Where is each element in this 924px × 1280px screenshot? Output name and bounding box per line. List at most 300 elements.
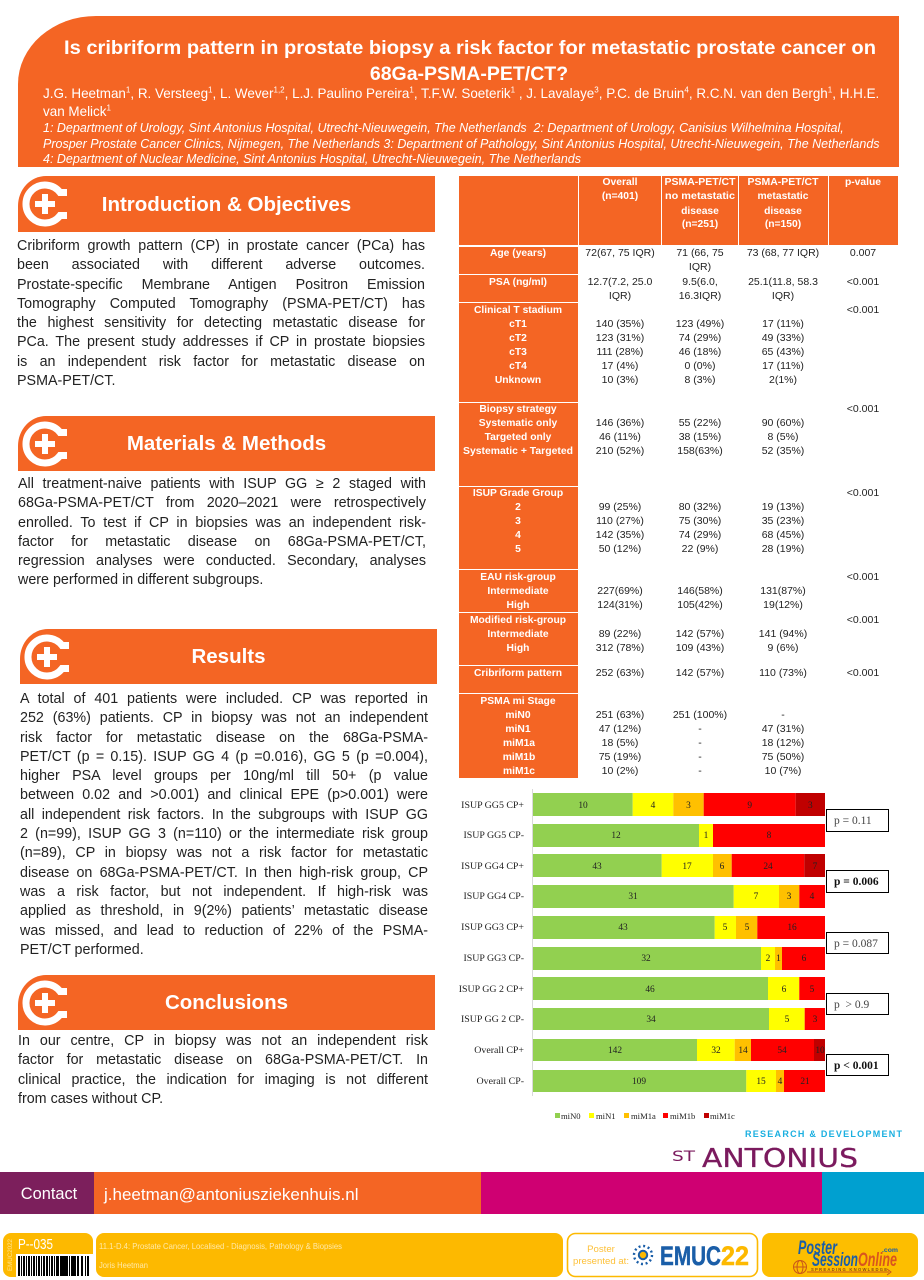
row: PSMA mi stage: 251 (100%) — [673, 709, 727, 721]
bar: ISUP GG4 CP-: 31 — [628, 892, 638, 902]
text block: conclusions — [18, 1033, 428, 1107]
bar: ISUP GG3 CP+: 5 — [745, 923, 750, 933]
table header row — [459, 176, 898, 245]
row: ISUP grade group: 75 (30%) — [679, 515, 721, 527]
bar: Overall CP-: 4 — [778, 1077, 783, 1087]
table header row: disease — [764, 206, 802, 217]
bar: ISUP GG4 CP-: 7 — [754, 892, 759, 902]
row: PSMA mi stage: 75 (19%) — [599, 751, 641, 763]
row: age: 73 (68, 77 IQR) — [747, 247, 819, 259]
heading: Conclusions — [165, 991, 288, 1014]
text block: introduction: Cribriform growth pattern (CP) in prostate cancer (PCa) has — [17, 238, 425, 254]
logo wordmark: ST — [672, 1149, 696, 1165]
barcode — [18, 1256, 89, 1276]
row: PSMA mi stage: 251 (63%) — [596, 709, 644, 721]
logo wordmark — [672, 1144, 858, 1174]
chart legend: miN0 — [561, 1111, 581, 1121]
text block: methods: 68Ga-PSMA-PET/CT from 2020–2021 were retrospectively — [18, 495, 426, 511]
bar: ISUP GG 2 CP-: 5 — [785, 1015, 790, 1025]
PosterSessionOnline panel: Session — [812, 1250, 858, 1271]
row: PSMA mi stage: 75 (50%) — [762, 751, 804, 763]
colour block: magenta — [481, 1172, 822, 1214]
row: ISUP grade group: 3 — [515, 516, 521, 527]
row: ISUP grade group: 99 (25%) — [599, 501, 641, 513]
row: clinical T stadium: 17 (11%) — [762, 360, 804, 372]
affiliations: 4: Department of Nuclear Medicine, Sint Antonius Hospital, Utrecht-Nieuwegein, The Netherlands — [43, 152, 581, 166]
title — [64, 37, 876, 85]
row: biopsy strategy: 55 (22%) — [679, 417, 721, 429]
text block: introduction: the highest sensitivity for detecting metastatic disease for — [17, 315, 425, 331]
bar: Overall CP-: Overall CP- — [477, 1076, 524, 1087]
row: ISUP grade group: 4 — [515, 530, 521, 541]
bar: ISUP GG4 CP+: ISUP GG4 CP+ — [461, 861, 524, 872]
affiliations: Prosper Prostate Cancer Clinics, Nijmegen, The Netherlands 3: Department of Pathology, Sint Antonius Hospital, Utrecht-Nieuwegein, The Netherlands — [43, 136, 880, 150]
contact label background — [0, 1172, 94, 1214]
p-value box: GG3: p = 0.087 — [834, 938, 878, 950]
bar: ISUP GG 2 CP- — [461, 1008, 825, 1030]
table header row: Overall — [603, 177, 638, 188]
row: PSA: PSA (ng/ml) — [489, 277, 547, 288]
icon: medical cross — [22, 980, 67, 1026]
bar: ISUP GG 2 CP+: ISUP GG 2 CP+ — [459, 984, 524, 995]
row: ISUP grade group: <0.001 — [847, 487, 879, 499]
bar: ISUP GG5 CP+ — [461, 793, 825, 816]
row: age: 0.007 — [850, 247, 876, 259]
row: PSMA mi stage: - — [698, 751, 702, 763]
section header: Conclusions — [18, 975, 435, 1030]
row: ISUP grade group: 110 (27%) — [596, 515, 644, 527]
stacked bar chart: PSMA mi stage by ISUP group and CP — [459, 789, 889, 1121]
heading: Results — [191, 645, 266, 668]
row: EAU risk-group: 105(42%) — [677, 599, 723, 611]
table header row: no metastatic — [665, 191, 735, 202]
row: PSMA mi stage: 18 (12%) — [762, 737, 804, 749]
icon: medical cross — [24, 634, 69, 680]
row: PSMA mi stage: miN0 — [505, 710, 531, 721]
row: cribriform pattern: 110 (73%) — [759, 667, 807, 679]
bar: Overall CP+: 142 — [608, 1046, 622, 1056]
icon: medical cross — [22, 182, 67, 226]
bar: ISUP GG3 CP-: 2 — [766, 954, 771, 964]
table header row: PSMA-PET/CT — [748, 177, 819, 188]
table header row: disease — [681, 206, 719, 217]
text block: results: was missed, and lead to reduction of 22% of the PSMA- — [20, 923, 428, 939]
row: biopsy strategy: 8 (5%) — [768, 431, 798, 443]
EMUC22 panel: EMUC — [660, 1241, 721, 1271]
row: PSMA mi stage: miN1 — [505, 724, 531, 735]
bar: ISUP GG4 CP+ — [461, 854, 825, 877]
row: biopsy strategy: 38 (15%) — [679, 431, 721, 443]
text block: results: all independent risk factors. In the subgroups with ISUP GG — [20, 807, 428, 823]
row: age: Age (years) — [490, 248, 546, 259]
row: PSMA mi stage: 47 (31%) — [762, 723, 804, 735]
row: cribriform pattern: 142 (57%) — [676, 667, 724, 679]
text block: methods: regression analyses were conducted. Secondary, analyses — [18, 553, 426, 569]
row: ISUP grade group: 35 (23%) — [762, 515, 804, 527]
row: clinical T stadium: 2(1%) — [769, 374, 797, 386]
bar: Overall CP+ — [474, 1039, 825, 1061]
row: ISUP grade group: 68 (45%) — [762, 529, 804, 541]
row: PSA: 12.7(7.2, 25.0 — [588, 276, 653, 288]
icon: EMUC sun — [634, 1246, 652, 1264]
row: clinical T stadium: 74 (29%) — [679, 332, 721, 344]
bar: ISUP GG 2 CP-: 34 — [646, 1015, 656, 1025]
row: clinical T stadium: 17 (11%) — [762, 318, 804, 330]
text block: introduction: PCa. The present study addresses if CP in prostate biopsies — [17, 334, 425, 350]
poster id badge: P--035 — [18, 1237, 53, 1253]
row: clinical T stadium: 49 (33%) — [762, 332, 804, 344]
text block: methods: enrolled. To test if CP in biopsies was an independent risk- — [18, 515, 426, 531]
contact label: Contact — [21, 1185, 77, 1203]
bar: ISUP GG3 CP+: 5 — [723, 923, 728, 933]
row: ISUP grade group: 5 — [515, 544, 521, 555]
table header row: (n=150) — [765, 219, 801, 230]
row: clinical T stadium: 10 (3%) — [602, 374, 638, 386]
row: clinical T stadium: 123 (49%) — [676, 318, 724, 330]
row: PSMA mi stage — [459, 694, 804, 778]
authors: van Melick1 — [43, 104, 111, 119]
bar: ISUP GG5 CP-: 8 — [767, 831, 772, 841]
row: PSMA mi stage: 47 (12%) — [599, 723, 641, 735]
row: modified risk-group: Intermediate — [487, 629, 549, 640]
row: clinical T stadium: 111 (28%) — [597, 346, 643, 358]
row: PSMA mi stage: - — [698, 765, 702, 777]
row: ISUP grade group: 80 (32%) — [679, 501, 721, 513]
contact email: j.heetman@antoniusziekenhuis.nl — [104, 1185, 358, 1204]
bar: Overall CP+: 10 — [815, 1046, 825, 1056]
EMUC22 panel: presented at: — [573, 1256, 629, 1267]
row: PSA: IQR) — [772, 290, 794, 302]
p-value box: GG4: p = 0.006 — [834, 876, 879, 888]
text block: methods — [18, 476, 426, 588]
p-value box: GG2 — [826, 994, 888, 1014]
PosterSessionOnline panel: Online — [858, 1250, 897, 1271]
heading: Materials & Methods — [127, 432, 326, 455]
bar: ISUP GG3 CP-: 1 — [776, 954, 781, 964]
row: clinical T stadium: cT4 — [509, 361, 527, 372]
text block: conclusions: clinical practice, the indication for imaging is not different — [18, 1072, 428, 1088]
row: age: 72(67, 75 IQR) — [585, 247, 655, 259]
bar: ISUP GG 2 CP-: 3 — [813, 1015, 818, 1025]
EMUC22 panel: 22 — [721, 1241, 749, 1271]
bar: ISUP GG4 CP+: 24 — [763, 862, 773, 872]
row: PSA: 9.5(6.0, — [682, 276, 718, 288]
row: PSA: 25.1(11.8, 58.3 — [748, 276, 818, 288]
p-value box: GG5 — [826, 810, 888, 832]
row: EAU risk-group: Intermediate — [487, 586, 549, 597]
row: clinical T stadium: 65 (43%) — [762, 346, 804, 358]
bar: ISUP GG5 CP+: 9 — [747, 801, 752, 811]
text block: introduction: PSMA-PET/CT. — [17, 373, 116, 389]
row: EAU risk-group: High — [507, 600, 529, 611]
bar: Overall CP+: 32 — [711, 1046, 721, 1056]
icon: medical cross — [22, 422, 67, 466]
row: EAU risk-group: 146(58%) — [677, 585, 723, 597]
row: age: IQR) — [689, 261, 711, 273]
colour block: blue — [822, 1172, 924, 1214]
bar: Overall CP+: Overall CP+ — [474, 1045, 524, 1056]
row: biopsy strategy — [459, 403, 879, 486]
row: EAU risk-group — [459, 570, 879, 612]
row: PSMA mi stage: - — [698, 723, 702, 735]
p-value box: overall: p < 0.001 — [834, 1060, 879, 1072]
p-value box: overall — [826, 1054, 888, 1076]
text block: conclusions: In our centre, CP in biopsy was not an independent risk — [18, 1033, 428, 1049]
row: clinical T stadium: 17 (4%) — [602, 360, 638, 372]
row: PSMA mi stage: 10 (2%) — [602, 765, 638, 777]
EMUC22 panel — [568, 1234, 758, 1276]
text block: conclusions: factor for metastatic disease on 68Ga-PSMA-PET/CT. In — [18, 1052, 428, 1068]
bar: ISUP GG5 CP+: 3 — [808, 801, 813, 811]
row: biopsy strategy: 158(63%) — [677, 445, 723, 457]
title: Is cribriform pattern in prostate biopsy a risk factor for metastatic prostate cancer on — [64, 37, 876, 59]
row: biopsy strategy: 52 (35%) — [762, 445, 804, 457]
row: ISUP grade group: 28 (19%) — [762, 543, 804, 555]
bar: ISUP GG5 CP+: 10 — [578, 801, 588, 811]
PosterSessionOnline panel: SPREADING KNOWLEDGE — [811, 1267, 887, 1272]
chart legend: miM1b — [670, 1111, 695, 1121]
row: modified risk-group: Modified risk-group — [470, 615, 566, 626]
row: clinical T stadium: cT3 — [509, 347, 527, 358]
text block: results: (n=89), CP in biopsy was not a risk factor for metastatic — [20, 845, 428, 861]
row: biopsy strategy: <0.001 — [847, 403, 879, 415]
row: PSMA mi stage: miM1c — [503, 766, 535, 777]
row: PSA — [459, 275, 879, 302]
text block: results: applied as threshold, in 9(2%) patients’ metastatic disease — [20, 903, 428, 919]
logo: St Antonius research & development — [672, 1129, 902, 1172]
bar: ISUP GG5 CP-: ISUP GG5 CP- — [463, 830, 524, 841]
text block: introduction — [17, 238, 425, 389]
row: cribriform pattern: 252 (63%) — [596, 667, 644, 679]
row: ISUP grade group: 2 — [515, 502, 521, 513]
text block: introduction: Tomography Computed Tomography (PSMA-PET/CT) has — [17, 296, 425, 312]
p-value box: GG4 — [826, 870, 888, 892]
row: cribriform pattern: Cribriform pattern — [474, 668, 562, 679]
bar: ISUP GG5 CP+: 4 — [651, 801, 656, 811]
row: ISUP grade group — [459, 487, 879, 569]
row: PSA: <0.001 — [847, 276, 879, 288]
bar: ISUP GG 2 CP+: 46 — [645, 985, 655, 995]
bar: Overall CP-: 15 — [756, 1077, 766, 1087]
row: modified risk-group: <0.001 — [847, 614, 879, 626]
poster topic panel: 11.1-D.4: Prostate Cancer, Localised - Diagnosis, Pathology & Biopsies — [99, 1241, 342, 1251]
text block: results: A total of 401 patients were included. CP was reported in — [20, 691, 428, 707]
row: biopsy strategy: Targeted only — [485, 432, 552, 443]
row: clinical T stadium: 46 (18%) — [679, 346, 721, 358]
table: patient characteristics — [459, 176, 898, 778]
bar: ISUP GG5 CP-: 12 — [611, 831, 621, 841]
bar: ISUP GG3 CP-: 32 — [641, 954, 651, 964]
row: PSMA mi stage: 10 (7%) — [765, 765, 801, 777]
table header row: metastatic — [758, 191, 809, 202]
row: PSMA mi stage: - — [698, 737, 702, 749]
affiliations — [43, 121, 880, 166]
row: EAU risk-group: 227(69%) — [597, 585, 643, 597]
row: modified risk-group: 89 (22%) — [599, 628, 641, 640]
row: biopsy strategy: 46 (11%) — [599, 431, 641, 443]
icon: globe and arrow — [794, 1260, 891, 1275]
PosterSessionOnline panel: .com — [882, 1248, 898, 1254]
bar: ISUP GG3 CP+ — [461, 916, 825, 939]
row: PSA: 16.3IQR) — [679, 290, 721, 302]
bar: ISUP GG 2 CP+: 5 — [810, 985, 815, 995]
bar: ISUP GG4 CP+: 17 — [682, 862, 692, 872]
bar: ISUP GG3 CP+: 43 — [618, 923, 628, 933]
title: 68Ga-PSMA-PET/CT? — [370, 63, 568, 85]
row: modified risk-group — [459, 613, 879, 665]
bar: ISUP GG3 CP+: 16 — [787, 923, 797, 933]
row: cribriform pattern: <0.001 — [847, 667, 879, 679]
poster topic panel — [96, 1233, 563, 1277]
text block: conclusions: from cases without CP. — [18, 1091, 163, 1107]
text block: introduction: is an independent risk factor for metastatic disease on — [17, 354, 425, 370]
bar: ISUP GG4 CP+: 6 — [720, 862, 725, 872]
authors: J.G. Heetman1, R. Versteeg1, L. Wever1,2, L.J. Paulino Pereira1, T.F.W. Soeterik1 , J. Lavalaye3, P.C. de Bruin4, R.C.N. van den Bergh1, H.H.E. — [43, 86, 879, 101]
EMUC22 panel: Poster — [587, 1244, 616, 1255]
row: biopsy strategy: Systematic + Targeted — [463, 446, 573, 457]
row: EAU risk-group: 131(87%) — [760, 585, 806, 597]
row: PSMA mi stage: miM1a — [503, 738, 535, 749]
bar: Overall CP-: 109 — [632, 1077, 646, 1087]
row: modified risk-group: High — [507, 643, 529, 654]
row: EAU risk-group: 124(31%) — [597, 599, 643, 611]
PosterSessionOnline panel: Poster — [798, 1238, 838, 1259]
poster topic panel: Joris Heetman — [99, 1260, 148, 1270]
bar: ISUP GG4 CP+: 7 — [813, 862, 818, 872]
row: clinical T stadium: 8 (3%) — [685, 374, 715, 386]
bar: ISUP GG 2 CP+: 6 — [782, 985, 787, 995]
row: ISUP grade group: 19 (13%) — [762, 501, 804, 513]
row: ISUP grade group: ISUP Grade Group — [473, 488, 563, 499]
poster id badge — [3, 1233, 93, 1277]
text block: results: 2 (n=99), ISUP GG 3 (n=110) or the intermediate risk group — [20, 826, 428, 842]
row: clinical T stadium: 140 (35%) — [596, 318, 644, 330]
bar: ISUP GG3 CP+: ISUP GG3 CP+ — [461, 922, 524, 933]
bar: Overall CP+: 14 — [738, 1046, 748, 1056]
table header row: p-value — [845, 177, 881, 188]
bar: ISUP GG4 CP- — [463, 885, 825, 908]
bar: ISUP GG 2 CP-: ISUP GG 2 CP- — [461, 1014, 524, 1025]
bar: ISUP GG4 CP-: 3 — [787, 892, 792, 902]
PosterSessionOnline panel — [762, 1233, 918, 1277]
row: age — [459, 247, 876, 274]
row: PSMA mi stage: 18 (5%) — [602, 737, 638, 749]
text block: results: was a risk factor, but not independent. If high-risk was — [20, 884, 428, 900]
row: clinical T stadium: <0.001 — [847, 304, 879, 316]
row: biopsy strategy: 210 (52%) — [596, 445, 644, 457]
row: modified risk-group: 9 (6%) — [768, 642, 798, 654]
p-value box: GG3 — [826, 932, 888, 954]
row: clinical T stadium: 123 (31%) — [596, 332, 644, 344]
section header: Materials & Methods — [18, 416, 435, 471]
text block: results: 252 (63%) patients. CP in biopsy was not an independent — [20, 710, 428, 726]
bar: ISUP GG3 CP-: ISUP GG3 CP- — [463, 953, 524, 964]
row: clinical T stadium: 0 (0%) — [685, 360, 715, 372]
poster id badge: EMUC2022 — [7, 1239, 14, 1271]
p-value box: GG2: p > 0.9 — [834, 999, 869, 1011]
row: clinical T stadium: Clinical T stadium — [474, 305, 562, 316]
text block: results: risk factor for metastatic disease on the 68Ga-PSMA- — [20, 730, 428, 746]
bar: ISUP GG3 CP- — [463, 947, 825, 970]
row: clinical T stadium: Unknown — [495, 375, 541, 386]
row: modified risk-group: 142 (57%) — [676, 628, 724, 640]
row: modified risk-group: 141 (94%) — [759, 628, 807, 640]
row: clinical T stadium — [459, 303, 879, 402]
row: PSMA mi stage: miM1b — [503, 752, 535, 763]
affiliations: 1: Department of Urology, Sint Antonius Hospital, Utrecht-Nieuwegein, The Netherlands 2: Department of Urology, Canisius Wilhelmina Hospital, — [43, 121, 844, 135]
row: EAU risk-group: EAU risk-group — [480, 572, 556, 583]
text block: methods: factor for metastatic disease on 68Ga-PSMA-PET/CT, — [18, 534, 426, 550]
section header: Introduction & Objectives — [18, 176, 435, 232]
bar: ISUP GG4 CP-: 4 — [810, 892, 815, 902]
row: EAU risk-group: <0.001 — [847, 571, 879, 583]
table header row: PSMA-PET/CT — [664, 177, 736, 188]
row: clinical T stadium: cT2 — [509, 333, 527, 344]
contact bar — [0, 1172, 924, 1214]
bar: ISUP GG5 CP+: 3 — [686, 801, 691, 811]
row: PSMA mi stage: - — [781, 709, 785, 721]
chart legend: miN1 — [596, 1111, 616, 1121]
row: biopsy strategy: Systematic only — [479, 418, 557, 429]
row: ISUP grade group: 50 (12%) — [599, 543, 641, 555]
row: ISUP grade group: 142 (35%) — [596, 529, 644, 541]
header panel — [18, 16, 899, 167]
text block: results: higher PSA level groups per 10ng/ml till 50+ (p value — [20, 768, 428, 784]
row: PSA: IQR) — [609, 290, 631, 302]
table header row: (n=251) — [682, 219, 718, 230]
authors — [43, 86, 879, 119]
text block: introduction: Prostate-specific Membrane Antigen Positron Emission — [17, 277, 425, 293]
text block: results: PET/CT (p = 0.15). ISUP GG 4 (p =0.016), GG 5 (p =0.004), — [20, 749, 428, 765]
bar: Overall CP+: 54 — [777, 1046, 787, 1056]
text block: results — [20, 691, 428, 958]
chart legend — [555, 1111, 735, 1121]
text block: methods: were performed in different subgroups. — [18, 572, 263, 588]
chart legend: miM1c — [710, 1111, 735, 1121]
bar: ISUP GG4 CP+: 43 — [592, 862, 602, 872]
row: clinical T stadium: cT1 — [509, 319, 527, 330]
chart legend: miM1a — [631, 1111, 656, 1121]
text block: results: disease on 68Ga-PSMA-PET/CT. In then high-risk group, CP — [20, 865, 428, 881]
heading: Introduction & Objectives — [102, 193, 351, 216]
bar: ISUP GG 2 CP+ — [459, 977, 825, 1000]
row: biopsy strategy: 90 (60%) — [762, 417, 804, 429]
row: modified risk-group: 312 (78%) — [596, 642, 644, 654]
row: modified risk-group: 109 (43%) — [676, 642, 724, 654]
logo tagline: RESEARCH & DEVELOPMENT — [745, 1129, 902, 1139]
footer strip — [3, 1232, 918, 1278]
bar: ISUP GG5 CP- — [463, 824, 825, 847]
bar: Overall CP-: 21 — [800, 1077, 810, 1087]
row: cribriform pattern — [459, 666, 879, 693]
text block: results: PET/CT performed. — [20, 942, 144, 958]
bar: ISUP GG3 CP-: 6 — [802, 954, 807, 964]
bar: Overall CP- — [477, 1070, 825, 1092]
text block: results: between 0.02 and >0.001) and clinical EPE (p>0.001) were — [20, 787, 428, 803]
text block: introduction: been associated with different adverse outcomes. — [17, 257, 425, 273]
row: biopsy strategy: 146 (36%) — [596, 417, 644, 429]
bar: ISUP GG5 CP-: 1 — [704, 831, 709, 841]
bar: ISUP GG4 CP-: ISUP GG4 CP- — [463, 891, 524, 902]
section header: Results — [20, 629, 437, 684]
row: biopsy strategy: Biopsy strategy — [479, 404, 557, 415]
bar: ISUP GG5 CP+: ISUP GG5 CP+ — [461, 800, 524, 811]
p-value box: GG5: p = 0.11 — [834, 815, 872, 827]
row: ISUP grade group: 74 (29%) — [679, 529, 721, 541]
row: ISUP grade group: 22 (9%) — [682, 543, 718, 555]
text block: methods: All treatment-naive patients with ISUP GG ≥ 2 staged with — [18, 476, 426, 492]
row: PSMA mi stage: PSMA mi Stage — [480, 696, 556, 707]
